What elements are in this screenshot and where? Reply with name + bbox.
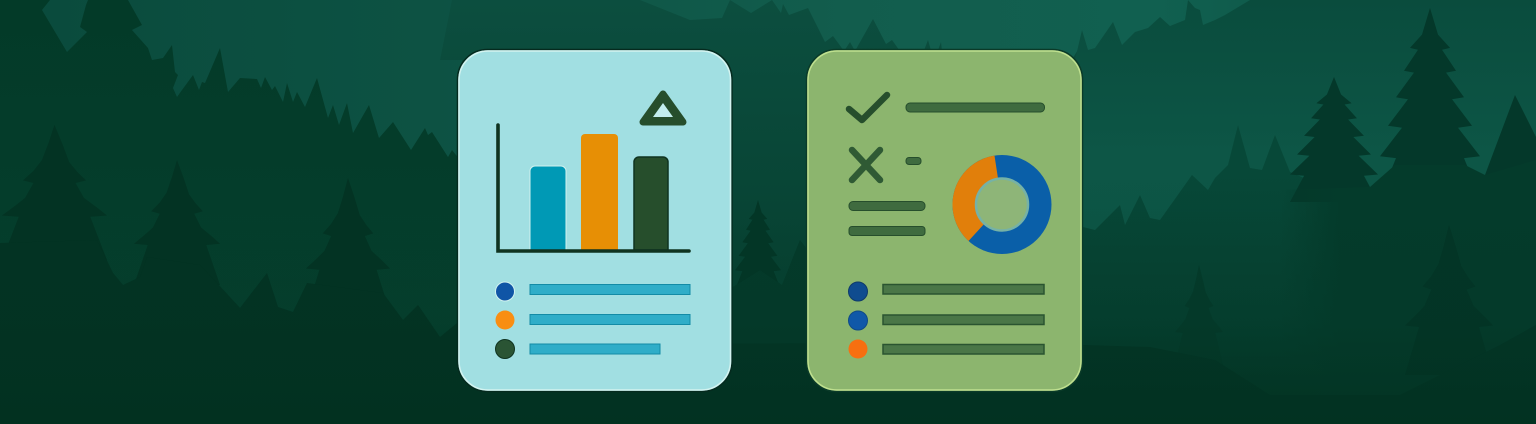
legend dot: blue <box>496 282 514 301</box>
legend dot: navy <box>848 282 868 301</box>
background: lower right ridge <box>1075 125 1536 424</box>
legend dot: orange <box>496 310 514 330</box>
legend line 1 <box>530 284 690 294</box>
panel: bar chart card <box>458 50 732 392</box>
background: bottom fade <box>0 200 1536 424</box>
text line 2 <box>849 226 925 236</box>
legend line 2 <box>883 315 1044 324</box>
background: centre pine <box>735 200 781 290</box>
panel: checklist and donut card <box>806 50 1082 392</box>
legend line 3 <box>883 344 1044 354</box>
donut: orange slice <box>952 156 1002 241</box>
background: left pines <box>2 125 390 313</box>
legend line 3 <box>530 344 660 354</box>
background: centre ridge <box>440 0 1100 345</box>
donut: blue slice <box>952 155 1052 254</box>
background: centre lower ridge <box>725 240 905 424</box>
background: right ridge band <box>1075 0 1536 424</box>
bar chart <box>498 125 689 251</box>
cross line <box>906 158 921 164</box>
icon: cross mark <box>852 150 880 180</box>
legend: donut <box>848 282 1044 358</box>
check line <box>906 103 1044 112</box>
legend: chart <box>496 282 690 358</box>
donut: centre <box>976 178 1028 230</box>
legend dot: dark green <box>496 340 514 358</box>
donut chart <box>952 155 1052 254</box>
background: right lower pines <box>1175 225 1493 375</box>
legend line 1 <box>883 284 1044 294</box>
legend dot: orange <box>848 340 868 358</box>
legend dot: blue <box>848 311 868 330</box>
icon: warning triangle <box>643 94 683 122</box>
text line 1 <box>849 202 925 210</box>
background: forest floor <box>460 325 1536 424</box>
bar: teal <box>530 166 566 250</box>
icon: check mark <box>849 95 887 120</box>
legend line 2 <box>530 314 690 324</box>
background: left dark hillside <box>0 0 500 424</box>
background: right pines <box>1290 8 1536 250</box>
bar: orange <box>581 134 618 250</box>
chart axes <box>498 125 689 251</box>
bar: dark green <box>634 157 668 250</box>
background: left front ground <box>0 240 500 424</box>
background: right forest mass <box>1280 160 1536 424</box>
